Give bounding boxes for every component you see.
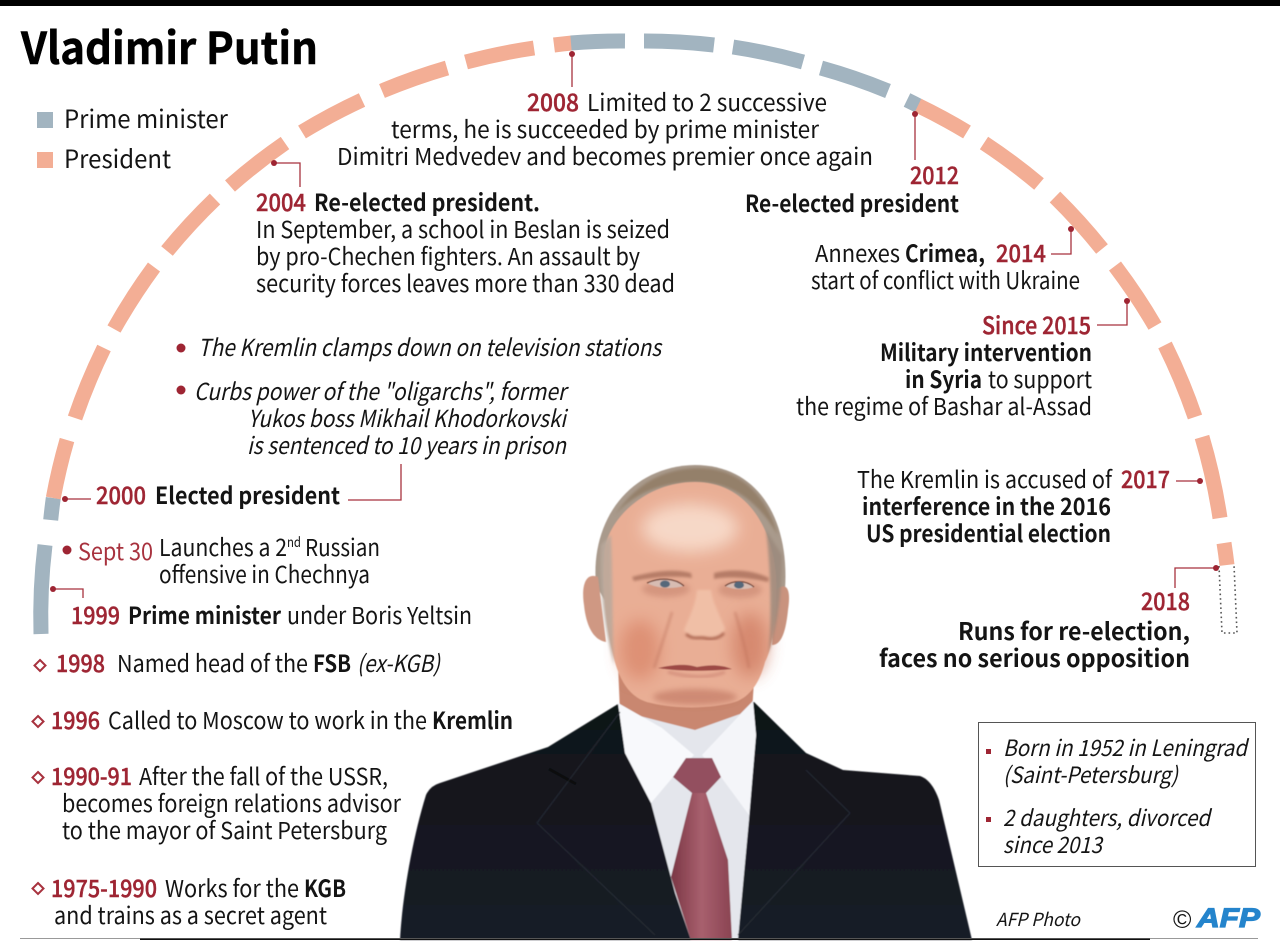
event: 1999: under Boris Yeltsin (287, 597, 472, 631)
event: 2014 (811, 226, 1080, 296)
event: 2008: Limited to 2 successive (587, 84, 827, 118)
ears (583, 576, 606, 642)
event: 1999: Prime minister (128, 597, 282, 631)
biography box: since 2013 (1003, 828, 1104, 860)
event: Sept 30: nd (287, 532, 301, 552)
event: Sept 30 (62, 529, 380, 590)
portrait (400, 465, 972, 940)
timeline arc (41, 41, 1227, 634)
legend (37, 100, 228, 176)
event: since 2015 (796, 298, 1130, 422)
event: 1975-1990: KGB (304, 870, 346, 904)
event: Sept 30: Launches a 2 (159, 529, 287, 563)
event: 2008 (337, 51, 873, 172)
event: 2012: 2012 (910, 157, 959, 191)
event: 1996: Kremlin (432, 702, 513, 736)
forehead highlight (642, 504, 738, 552)
event: since 2015: Since 2015 (982, 307, 1091, 341)
event: 2018: 2018 (1141, 583, 1190, 617)
event: 2008: 2008 (527, 84, 579, 118)
biography box: 2 daughters, divorced (1003, 801, 1213, 833)
nose (684, 590, 725, 638)
biography box (978, 722, 1256, 866)
event: 1990-91: 1990-91 (51, 758, 132, 792)
eyes (647, 580, 684, 588)
event: 2008: Dimitri Medvedev and becomes premier once again (337, 138, 873, 172)
event: 2004: 2004 (256, 184, 306, 218)
event: 2014: 2014 (996, 235, 1046, 269)
event: 1998 (34, 645, 441, 679)
event: since 2015: the regime of Bashar al-Assad (796, 388, 1092, 422)
eye sockets (642, 581, 690, 597)
title: Vladimir Putin (20, 13, 318, 77)
event: 2012: Re-elected president (745, 185, 959, 219)
hair (595, 465, 785, 610)
event: 2014: Annexes (815, 235, 900, 269)
photo credit: AFP Photo (996, 906, 1082, 932)
jacket (400, 702, 972, 940)
event: 1990-91: becomes foreign relations advisor (62, 785, 402, 819)
event: 1990-91 (32, 758, 402, 846)
event: 2018: Runs for re-election, (958, 612, 1190, 647)
event: 2017: 2017 (1121, 461, 1170, 495)
event: 1998: 1998 (56, 645, 105, 679)
event: 2018: faces no serious opposition (879, 639, 1190, 674)
AFP copyright logo (1173, 903, 1261, 934)
notes on Kremlin actions: Yukos boss Mikhail Khodorkovski (248, 400, 569, 434)
event: 2018 (879, 565, 1219, 674)
event: 2000: 2000 (96, 477, 146, 511)
AFP copyright logo: © (1173, 906, 1192, 934)
event: 1975-1990: Works for the (165, 870, 299, 904)
dotted future term (1219, 565, 1237, 633)
event: 1975-1990: and trains as a secret agent (54, 897, 327, 931)
event: since 2015: to support (988, 361, 1092, 395)
event: 1999 (50, 586, 472, 631)
event: 1975-1990: 1975-1990 (51, 870, 157, 904)
event: 2004: by pro-Chechen fighters. An assault by (256, 238, 640, 272)
event: 2004 (256, 160, 675, 299)
event: 2004: In September, a school in Beslan is seized (256, 211, 670, 245)
event: 1990-91: to the mayor of Saint Petersburg (62, 812, 387, 846)
face (603, 482, 776, 707)
shirt (618, 701, 756, 940)
biography box: Born in 1952 in Leningrad (1003, 731, 1250, 763)
legend item: president: President (64, 140, 172, 176)
event: 2017: The Kremlin is accused of (857, 461, 1113, 495)
notes on Kremlin actions: The Kremlin clamps down on television stations (198, 329, 663, 363)
neck (618, 665, 755, 735)
event: since 2015: Military intervention (880, 334, 1092, 368)
AFP copyright logo: AFP (1196, 903, 1261, 933)
notes on Kremlin actions: is sentenced to 10 years in prison (247, 427, 567, 461)
event: Sept 30: Russian (305, 529, 380, 563)
biography box: (Saint-Petersburg) (1003, 758, 1179, 790)
temple hair (601, 535, 614, 665)
event: Sept 30: Sept 30 (78, 533, 153, 567)
event: 1996: Called to Moscow to work in the (108, 702, 427, 736)
event: 2014: Crimea, (905, 235, 985, 269)
notes on Kremlin actions: Curbs power of the "oligarchs", former (194, 373, 569, 407)
event: 1998: FSB (313, 645, 351, 679)
event: Sept 30: offensive in Chechnya (159, 556, 370, 590)
event: 1999: 1999 (71, 597, 120, 631)
tie (671, 758, 732, 940)
event: 2017: US presidential election (866, 515, 1111, 549)
event: 2008: terms, he is succeeded by prime minister (391, 111, 820, 145)
notes on Kremlin actions (176, 329, 663, 461)
legend item: prime minister: Prime minister (64, 100, 228, 136)
event: 2017 (857, 461, 1203, 549)
event: 2017: interference in the (862, 488, 1055, 522)
event: 2004: Re-elected president. (314, 184, 540, 218)
bottom rule (20, 938, 1258, 940)
lapels (537, 712, 850, 935)
event: 1975-1990 (32, 870, 346, 931)
mouth (658, 665, 732, 671)
event: 1998: (ex-KGB) (357, 645, 441, 679)
event: 2014: start of conflict with Ukraine (811, 262, 1080, 296)
event: 2017: 2016 (1060, 488, 1111, 522)
event: 2012 (745, 111, 959, 219)
brows (632, 571, 692, 581)
event: 1990-91: After the fall of the USSR, (139, 758, 388, 792)
event: 2000: Elected president (155, 477, 340, 511)
event: since 2015: in Syria (905, 361, 982, 395)
cheek shading (620, 620, 660, 680)
event: 1998: Named head of the (117, 645, 308, 679)
event: 2000 (62, 464, 401, 511)
event: 2004: security forces leaves more than 330 dead (256, 265, 675, 299)
event: 1996: 1996 (51, 702, 100, 736)
